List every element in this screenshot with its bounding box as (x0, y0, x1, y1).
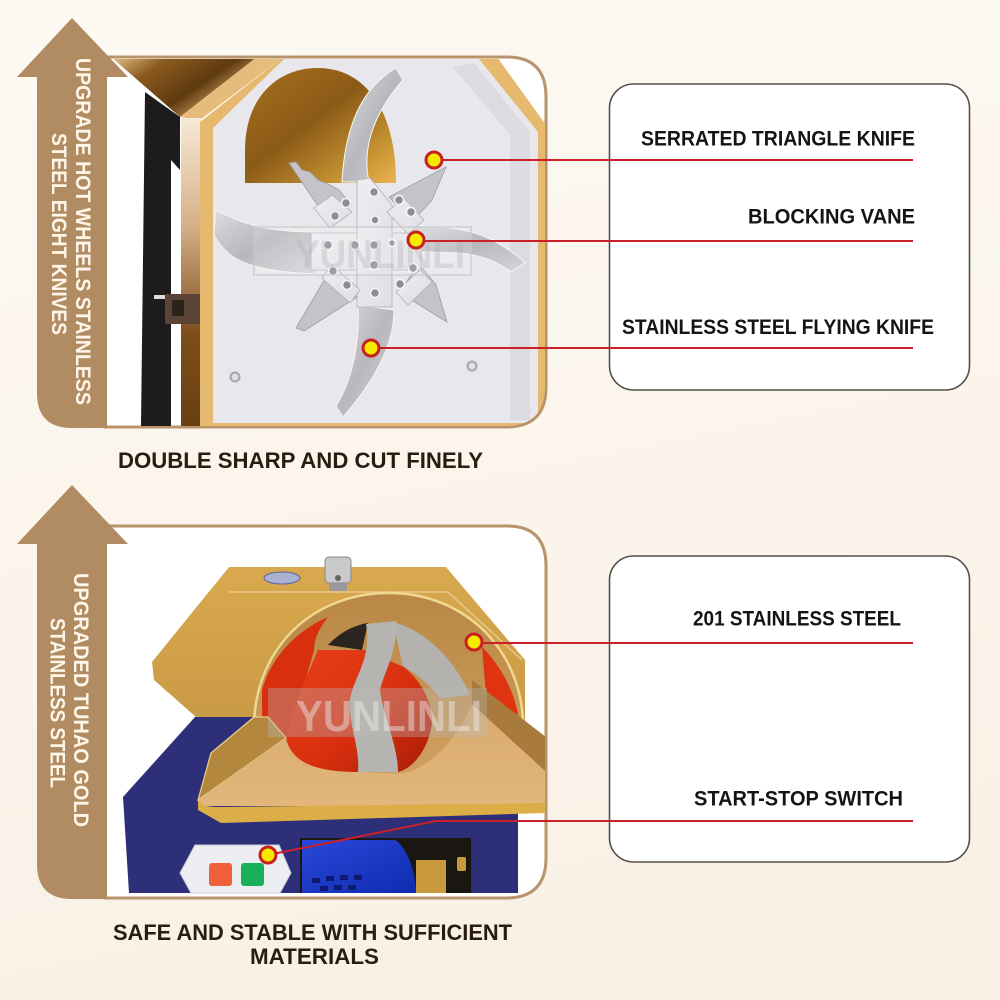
illustration: gold funnel edge (180, 57, 283, 120)
illustration: control panel (180, 845, 291, 893)
arrow text: upper: UPGRADE HOT WHEELS STAINLESS (71, 58, 95, 405)
callout box: upper (610, 84, 970, 390)
illustration: red drum (286, 650, 432, 772)
caption: upper: DOUBLE SHARP AND CUT FINELY (118, 448, 483, 473)
arrow text: lower (46, 573, 93, 827)
illustration: panel inner shade (453, 63, 530, 420)
illustration: top latch (325, 557, 351, 591)
label: 201 stainless steel: 201 STAINLESS STEEL (693, 608, 901, 630)
label: blocking vane: BLOCKING VANE (748, 206, 915, 228)
illustration: motor vents (312, 875, 362, 891)
illustration: black door frame (141, 92, 180, 426)
caption: lower: MATERIALS (250, 944, 379, 969)
illustration: centre plates (311, 178, 432, 307)
illustration: blue motor (302, 840, 416, 893)
illustration: dark shadow (328, 623, 368, 650)
watermark: upper (254, 227, 471, 277)
illustration: top crescent blade (342, 68, 403, 182)
caption: lower (113, 920, 512, 969)
illustration: tray floor (198, 704, 546, 806)
leader lines: upper (371, 160, 913, 348)
arrow text: lower: STAINLESS STEEL (46, 618, 70, 788)
illustration: tan label (416, 860, 446, 893)
callout box: lower (610, 556, 970, 862)
arrow text: lower: UPGRADED TUHAO GOLD (69, 573, 93, 827)
arrow text: upper: STEEL EIGHT KNIVES (47, 133, 71, 335)
illustration: small label (457, 857, 466, 871)
illustration: gold funnel (111, 57, 257, 117)
label: start-stop switch: START-STOP SWITCH (694, 788, 903, 810)
caption: lower: SAFE AND STABLE WITH SUFFICIENT (113, 920, 512, 945)
watermark: lower: YUNLINLI (296, 692, 482, 741)
illustration: rivets (230, 362, 476, 382)
illustration: bottom crescent blade (336, 305, 394, 417)
illustration: blue base (123, 717, 518, 893)
illustration: tray front edge (198, 800, 546, 823)
label: serrated triangle knife: SERRATED TRIANGLE KNIFE (641, 128, 915, 150)
arrow: lower upgrade arrow (17, 485, 128, 899)
leader lines: lower (268, 643, 913, 855)
label: stainless steel flying knife: STAINLESS STEEL FLYING KNIFE (622, 316, 934, 339)
panel: lower machine photo (105, 526, 546, 898)
illustration: red side right (482, 647, 518, 715)
illustration: left curved blade (214, 210, 316, 274)
illustration: gold housing (152, 567, 525, 725)
illustration: grey S-band (350, 621, 398, 772)
marker dots: lower (260, 634, 482, 863)
illustration: right curved blade (400, 226, 525, 272)
illustration: red button (209, 863, 232, 886)
illustration: tray left wall (198, 717, 286, 800)
illustration: bolts (324, 188, 418, 298)
illustration: arch interior (254, 593, 523, 780)
panel: upper blade photo (105, 57, 546, 427)
illustration: serrated triangle blades (289, 162, 447, 331)
illustration: grey inner panel (213, 59, 538, 423)
illustration: golden arch window (245, 68, 396, 183)
illustration: latch (154, 294, 201, 324)
arrow text: upper (47, 58, 95, 405)
illustration: green button (241, 863, 264, 886)
illustration: badge (264, 572, 300, 584)
illustration: gold frame (200, 57, 546, 426)
illustration: bronze door post (181, 118, 201, 426)
illustration: tray right wall (472, 680, 546, 772)
illustration: grey sweep (393, 622, 470, 698)
arrow: upper upgrade arrow (17, 18, 128, 428)
illustration: motor window (300, 838, 471, 893)
illustration: housing seam (229, 592, 522, 660)
illustration: red side left (262, 617, 328, 750)
marker dots: upper (363, 152, 442, 356)
watermark: upper: YUNLINLI (295, 233, 465, 277)
